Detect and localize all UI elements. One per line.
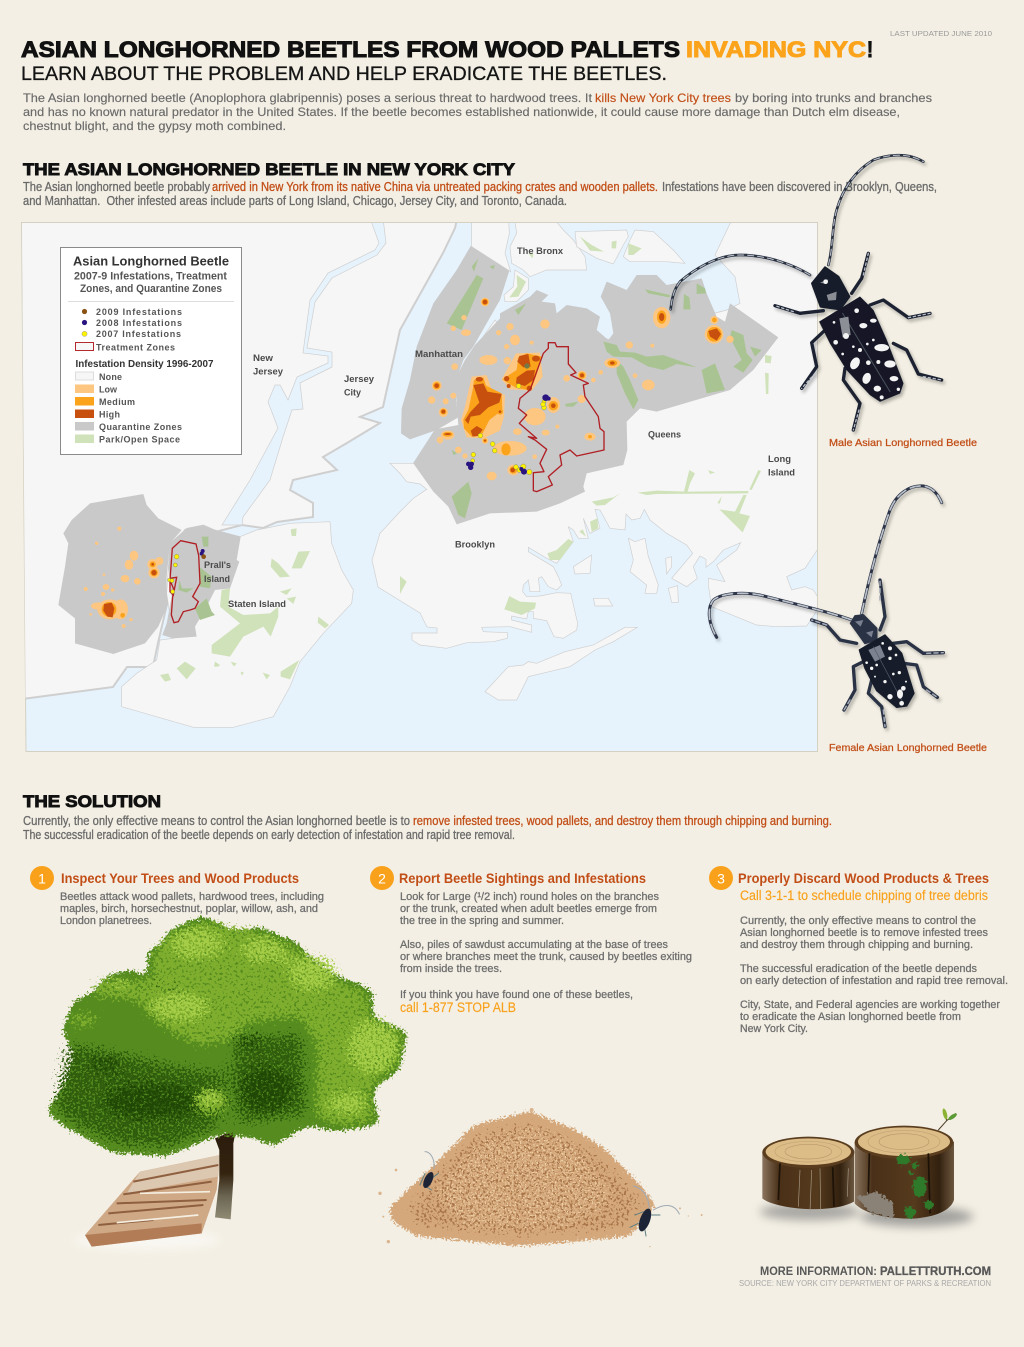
map labels: Brooklyn [455, 540, 495, 550]
illustration: tree [45, 915, 408, 1219]
label: female beetle: Female Asian Longhorned Beetle [829, 742, 987, 754]
step 3 subheading: Call 3-1-1 to schedule chipping of tree debris [740, 888, 988, 903]
illustration: tree stumps [760, 1108, 973, 1227]
map legend: 2007 Infestations [96, 329, 181, 339]
map labels [204, 246, 795, 610]
step 2 text [400, 891, 692, 1015]
map legend: Park/Open Space [99, 434, 180, 444]
step 3 text: New York City. [740, 1023, 808, 1035]
step 3 heading: Properly Discard Wood Products & Trees [738, 870, 989, 886]
map legend: Quarantine Zones [99, 422, 182, 432]
map legend: Medium [99, 397, 135, 407]
step 3 number badge [709, 866, 733, 890]
infestation markers: 2007, 2008, 2009 [466, 363, 551, 475]
map legend: Asian Longhorned Beetle [73, 254, 229, 268]
heading: the solution: THE SOLUTION [23, 793, 161, 811]
step 2 text: If you think you have found one of these beetles, [400, 989, 633, 1001]
step 2 text: Look for Large (¹/2 inch) round holes on the branches [400, 891, 659, 903]
sprout [938, 1108, 958, 1130]
illustration: sawdust pile [378, 1108, 703, 1247]
map legend: Zones, and Quarantine Zones [80, 283, 222, 295]
footer: more information [760, 1264, 991, 1278]
map labels: City [344, 388, 362, 398]
footer: source: SOURCE: NEW YORK CITY DEPARTMENT OF PARKS & RECREATION [739, 1278, 991, 1288]
step 3 text: The successful eradication of the beetle depends [740, 963, 977, 975]
heading: beetle in NYC: THE ASIAN LONGHORNED BEETLE IN NEW YORK CITY [23, 161, 515, 179]
land: New Jersey [15, 215, 458, 700]
intro paragraph [23, 91, 932, 133]
step 3 text: Currently, the only effective means to control the [740, 915, 976, 927]
map labels: Long [768, 454, 791, 465]
parks inside quarantine zones [447, 258, 762, 518]
step 2 text: or where branches meet the trunk, caused by beetles exiting [400, 951, 692, 963]
map legend: None [99, 372, 122, 382]
map labels: Island [768, 468, 795, 478]
title: INVADING NYC [686, 37, 866, 62]
title: ASIAN LONGHORNED BEETLES FROM WOOD PALLETS [21, 37, 680, 62]
paragraph: beetle in NYC [23, 179, 937, 208]
step 3 text: and destroy them through chipping and burning. [740, 939, 973, 951]
map labels: The Bronx [517, 246, 564, 257]
land: Staten Island [58, 494, 353, 727]
icon: male beetle [671, 155, 942, 430]
map legend: 2007-9 Infestations, Treatment [74, 270, 227, 282]
step 2 heading: Report Beetle Sightings and Infestations [399, 870, 646, 886]
intro paragraph: The Asian longhorned beetle (Anoplophora glabripennis) poses a serious threat to hardwood trees. It [23, 91, 593, 105]
infestation markers: west [168, 549, 206, 594]
paragraph: beetle in NYC: arrived in New York from its native China via untreated packing crates and wooden pallets. [212, 179, 658, 194]
tree trunk [215, 1127, 237, 1219]
intro paragraph: by boring into trunks and branches [735, 91, 932, 105]
icon: female beetle [709, 486, 943, 727]
step 1: inspect [30, 866, 324, 927]
step 2: report [370, 866, 692, 1015]
step 2 text: or the trunk, created when adult beetles emerge from [400, 903, 657, 915]
step 3 text [740, 915, 1008, 1035]
step 1 number badge: 1 [38, 870, 46, 886]
quarantine zones: west [58, 494, 182, 654]
step 2 number badge [370, 866, 394, 890]
map legend: Infestation Density 1996-2007 [76, 358, 214, 370]
step 1 number badge [30, 866, 54, 890]
map labels: Prall's [204, 560, 231, 571]
icon: small beetles on sawdust [420, 1152, 679, 1236]
subtitle: LEARN ABOUT THE PROBLEM AND HELP ERADICATE THE BEETLES. [21, 63, 667, 85]
paragraph: beetle in NYC: Infestations have been discovered in Brooklyn, Queens, [662, 179, 937, 194]
map legend [60, 248, 242, 454]
intro paragraph: chestnut blight, and the gypsy moth combined. [23, 119, 286, 133]
paragraph: beetle in NYC: The Asian longhorned beetle probably [23, 179, 210, 194]
step 1 text: maples, birch, horsechestnut, poplar, willow, ash, and [60, 903, 318, 915]
map labels: Manhattan [415, 349, 463, 360]
paragraph: the solution: Currently, the only effective means to control the Asian longhorned beetle is to [23, 813, 410, 828]
map legend: Treatment Zones [96, 342, 175, 352]
step 2 text: from inside the trees. [400, 963, 502, 975]
tree canopy [45, 915, 408, 1157]
land: Long Island, Brooklyn and Queens [372, 217, 822, 700]
step 2 number badge: 2 [378, 870, 386, 886]
last updated note: LAST UPDATED JUNE 2010 [890, 29, 992, 38]
map labels: Jersey [253, 366, 284, 378]
map legend: 2008 Infestations [96, 318, 182, 328]
map legend: Low [99, 384, 118, 394]
map legend: High [99, 410, 120, 420]
step 3 text: City, State, and Federal agencies are working together [740, 999, 1000, 1011]
step 1 heading: Inspect Your Trees and Wood Products [61, 870, 299, 886]
footer: more information: PALLETTRUTH.COM [880, 1264, 991, 1278]
step 2 text: the tree in the spring and summer. [400, 915, 564, 927]
step 3 number badge: 3 [717, 870, 725, 886]
land: Bronx and harbor islands [401, 210, 778, 524]
paragraph: the solution: The successful eradication of the beetle depends on early detection of infestation and rapid tree removal. [23, 827, 515, 842]
map legend: 2009 Infestations [96, 307, 182, 317]
left stump [762, 1137, 854, 1212]
moss [897, 1155, 934, 1218]
map labels: Jersey [344, 374, 375, 385]
step 2 text: Also, piles of sawdust accumulating at the base of trees [400, 939, 668, 951]
step 3 text: on early detection of infestation and rapid tree removal. [740, 975, 1008, 987]
map labels: Island [204, 574, 230, 585]
treatment zone: west [170, 541, 200, 623]
step 1 text: Beetles attack wood pallets, hardwood trees, including [60, 891, 324, 903]
label: male beetle: Male Asian Longhorned Beetle [829, 437, 977, 449]
step 3 text: Asian longhorned beetle is to remove infested trees [740, 927, 988, 939]
footer: more information: MORE INFORMATION: [760, 1264, 877, 1278]
map labels: Staten Island [228, 599, 286, 610]
step 3: discard [709, 866, 1008, 1035]
treatment zone: Brooklyn and Queens [518, 343, 604, 492]
step 1 text [60, 891, 324, 927]
step 2 text: call 1-877 STOP ALB [400, 1000, 516, 1015]
infestation density blobs [428, 298, 734, 480]
map labels: Queens [648, 430, 681, 440]
paragraph: beetle in NYC: and Manhattan. Other infested areas include parts of Long Island, Chicago, Jersey City, and Toronto, Canada. [23, 193, 567, 208]
infestations: west [84, 527, 163, 628]
intro paragraph: kills New York City trees [595, 91, 731, 105]
paragraph: the solution: remove infested trees, wood pallets, and destroy them through chipping and burning. [413, 813, 832, 828]
illustration: pallet [73, 1155, 220, 1250]
map labels: New [253, 353, 274, 364]
water: inland river [222, 218, 386, 525]
right stump [855, 1126, 954, 1219]
step 1 text: London planetrees. [60, 915, 152, 927]
quarantine zones: Manhattan, Brooklyn, Queens [401, 246, 509, 439]
paragraph: the solution [23, 813, 832, 842]
step 3 text: to eradicate the Asian longhorned beetle from [740, 1011, 961, 1023]
intro paragraph: and has no known natural predator in the United States. If the beetle becomes established nationwide, it could cause more damage than Dutch elm disease, [23, 105, 900, 119]
title: ! [867, 37, 873, 62]
